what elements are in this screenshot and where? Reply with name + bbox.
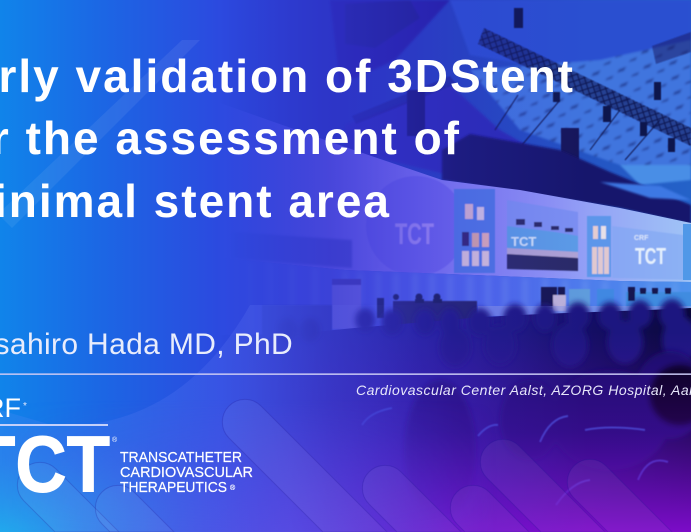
- screen: left TCT logo: [380, 176, 454, 273]
- big curved light shape: [0, 305, 326, 478]
- stage and panel tables: [263, 286, 691, 334]
- bottom purple wash: [314, 351, 691, 532]
- screen: far-left video: [296, 238, 352, 268]
- screen: stage video: TCT: [511, 234, 536, 249]
- logo: TCT wordmark: [0, 436, 118, 493]
- logo: Transcatheter Cardiovascular Therapeutics: ®: [230, 484, 236, 492]
- lower-left cyan glow: [0, 453, 169, 532]
- logo: Transcatheter Cardiovascular Therapeutics: THERAPEUTICS: [120, 479, 227, 496]
- title: [0, 58, 572, 218]
- stage curtain: [265, 263, 691, 330]
- screen: far right video: [683, 224, 691, 280]
- logo: CRF: *: [23, 401, 27, 412]
- screen: right TCT logo: TCT: [635, 243, 666, 269]
- decorative rounded bands: [17, 399, 672, 532]
- logo: Transcatheter Cardiovascular Therapeutics: [120, 452, 252, 492]
- logo: TCT wordmark: ®: [112, 436, 118, 444]
- left gradient overlay: [0, 0, 548, 532]
- curved LED screen: [258, 117, 691, 282]
- divider line: [0, 373, 691, 375]
- lighting truss: [352, 8, 691, 164]
- screen: speakers panel 1: [454, 189, 495, 273]
- screen: left TCT logo: TCT: [395, 218, 434, 251]
- decorative diagonal band: [0, 40, 200, 228]
- logo: Transcatheter Cardiovascular Therapeutics: CARDIOVASCULAR: [120, 464, 253, 481]
- screen: speakers panel 2: [587, 216, 611, 277]
- screen: stage video: [507, 200, 578, 271]
- screen: right TCT logo: CRF: [634, 235, 649, 242]
- lower-middle violet blend: [41, 448, 440, 532]
- logo: Transcatheter Cardiovascular Therapeutics: TRANSCATHETER: [120, 449, 242, 466]
- stage floor: [478, 306, 691, 316]
- logo: CRF: [0, 398, 27, 417]
- screen: right TCT logo: [612, 226, 683, 280]
- audience: [304, 295, 691, 524]
- dark band above screen: [442, 134, 691, 224]
- panelists: [541, 287, 565, 309]
- stage sign: [332, 279, 361, 329]
- ceiling panels: [330, 0, 691, 185]
- logo rule: [0, 424, 108, 426]
